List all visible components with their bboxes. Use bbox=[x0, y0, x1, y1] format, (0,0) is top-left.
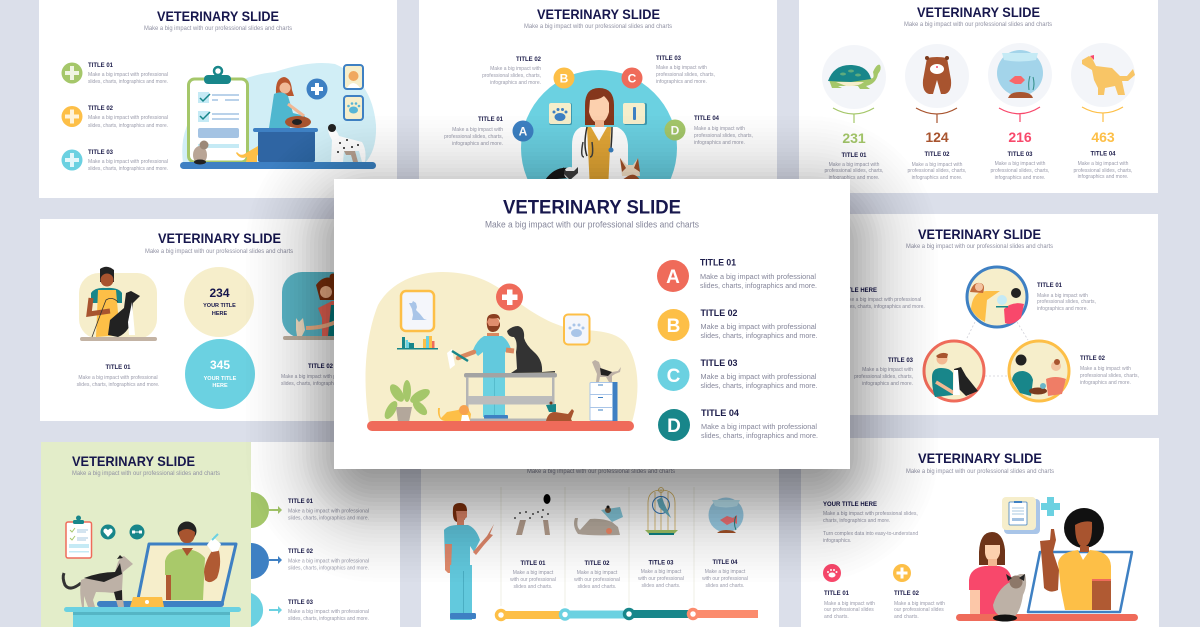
picture frame: dog bbox=[401, 291, 434, 331]
numbers and titles: TITLE 01 bbox=[841, 153, 867, 159]
item B: TITLE 02 bbox=[700, 308, 738, 319]
item list: Make a big impact with professional bbox=[288, 558, 369, 564]
numbers and titles: TITLE 04 bbox=[1090, 152, 1116, 158]
item B: Make a big impact with professional bbox=[700, 324, 817, 331]
callouts: Make a big impact with bbox=[862, 367, 913, 373]
orange cat bbox=[438, 405, 471, 421]
text block: charts, infographics and more. bbox=[823, 518, 890, 524]
subheading: Make a big impact with our professional slides and charts bbox=[524, 24, 672, 30]
subheading: Make a big impact with our professional slides and charts bbox=[72, 471, 220, 477]
floor bbox=[367, 421, 634, 431]
captions: slides, charts, infographics and more. bbox=[77, 382, 159, 388]
captions: Make a big impact bbox=[705, 569, 746, 575]
stat circle 234: HERE bbox=[212, 311, 227, 317]
numbers and titles: infographics and more. bbox=[912, 175, 962, 181]
captions: TITLE 02 bbox=[584, 561, 610, 567]
callouts: infographics and more. bbox=[452, 141, 503, 147]
captions: slides and charts. bbox=[514, 584, 552, 590]
subheading: Make a big impact with our professional slides and charts bbox=[145, 249, 293, 255]
item D: Make a big impact with professional bbox=[701, 424, 817, 431]
callouts: Make a big impact with bbox=[656, 65, 707, 71]
captions: with our professional bbox=[574, 577, 620, 583]
icon: medical cross bbox=[496, 284, 523, 310]
illustration: vet on laptop with cat bbox=[63, 522, 241, 627]
callouts: Make a big impact with bbox=[694, 126, 745, 132]
heading: VETERINARY SLIDE bbox=[158, 230, 281, 246]
numbers and titles: 463 bbox=[1091, 129, 1115, 145]
item list bbox=[288, 499, 369, 622]
stat circle 234 bbox=[184, 267, 254, 337]
badges A B C D: D bbox=[671, 124, 680, 138]
numbers and titles: Make a big impact with bbox=[829, 162, 880, 168]
icon items bbox=[823, 564, 945, 620]
item list: Make a big impact with professional bbox=[288, 609, 369, 615]
icon items: and charts. bbox=[824, 614, 849, 620]
circle: vets with plant bbox=[967, 267, 1027, 327]
callouts: infographics and more. bbox=[694, 140, 745, 146]
callouts: infographics and more. bbox=[1080, 380, 1131, 386]
panel: main centre slide bbox=[334, 179, 850, 469]
captions: with our professional bbox=[638, 576, 684, 582]
captions: slides, charts, infographics and more. bbox=[281, 381, 364, 387]
panel: slide bottom centre, timeline bbox=[421, 445, 779, 627]
item list: Make a big impact with professional bbox=[88, 72, 168, 78]
captions: TITLE 03 bbox=[648, 560, 674, 566]
captions: Make a big impact with professional bbox=[78, 375, 158, 381]
dashed connectors bbox=[966, 322, 1028, 376]
heading: VETERINARY SLIDE bbox=[72, 453, 195, 469]
icon: turtle bbox=[828, 65, 881, 89]
heading: VETERINARY SLIDE bbox=[157, 8, 279, 24]
panel: slide top left, checklist bbox=[39, 0, 397, 198]
item D: TITLE 04 bbox=[701, 408, 740, 419]
green side panel bbox=[41, 442, 251, 627]
panel: slide bottom left, laptop bbox=[41, 442, 400, 627]
callouts: slides, charts, infographics and more. bbox=[842, 304, 925, 310]
lettered list bbox=[657, 258, 818, 441]
item B: B bbox=[667, 316, 680, 337]
icon items: our professional slides bbox=[894, 607, 944, 613]
dividers bbox=[501, 487, 694, 606]
icon: cat bbox=[1082, 55, 1135, 95]
captions: with our professional bbox=[510, 577, 556, 583]
timeline bbox=[496, 610, 758, 620]
icon: bird cage bbox=[645, 488, 678, 535]
brown dog with cone bbox=[546, 402, 574, 421]
cabinet with cat bbox=[590, 360, 621, 421]
illustration: vet with kitten bbox=[282, 272, 353, 340]
text block: Make a big impact with professional slides, bbox=[823, 511, 918, 517]
heading: VETERINARY SLIDE bbox=[537, 6, 660, 22]
badges A B C D: A bbox=[519, 124, 528, 138]
stat circle 345: 345 bbox=[210, 358, 230, 372]
icon items: TITLE 01 bbox=[824, 591, 850, 597]
numbers and titles: 124 bbox=[925, 129, 949, 145]
icon items: Make a big impact with bbox=[894, 601, 945, 607]
captions: with our professional bbox=[702, 576, 748, 582]
illustration: pointing vet bbox=[444, 503, 494, 620]
panel: slide bottom right, telehealth bbox=[801, 438, 1159, 627]
main slide soft drop shadow, stacked translucent layers bbox=[246, 116, 938, 582]
panel: slide top right, animals bbox=[799, 0, 1158, 193]
numbers and titles: Make a big impact with bbox=[912, 162, 963, 168]
callouts: infographics and more. bbox=[490, 80, 541, 86]
stat circle 345: HERE bbox=[212, 383, 228, 389]
subheading: Make a big impact with our professional slides and charts bbox=[906, 469, 1054, 475]
callouts bbox=[444, 56, 753, 147]
veterinarian bbox=[447, 314, 514, 419]
callouts: professional slides, charts, bbox=[854, 374, 913, 380]
illustration: clipboard and icons bbox=[66, 516, 144, 558]
numbers and titles: 216 bbox=[1008, 129, 1032, 145]
numbers and titles: professional slides, charts, bbox=[991, 168, 1049, 174]
item list: TITLE 03 bbox=[288, 600, 314, 606]
numbers and titles: infographics and more. bbox=[1078, 174, 1128, 180]
item list: slides, charts, infographics and more. bbox=[288, 566, 369, 572]
item C: Make a big impact with professional bbox=[700, 374, 817, 381]
numbers and titles: professional slides, charts, bbox=[825, 168, 883, 174]
illustration: owner, cat and vet on laptop bbox=[956, 497, 1138, 622]
numbers and titles: Make a big impact with bbox=[1078, 161, 1129, 167]
illustration: doctor in circle bbox=[521, 70, 677, 226]
item B bbox=[658, 308, 818, 341]
animal circles bbox=[822, 43, 1135, 123]
callouts: TITLE 03 bbox=[888, 358, 914, 364]
circle: vet with dog bbox=[924, 341, 984, 401]
potted plant bbox=[382, 380, 432, 422]
stat circle 234: YOUR TITLE bbox=[203, 303, 236, 309]
main heading: VETERINARY SLIDE bbox=[503, 198, 681, 218]
item A: slides, charts, infographics and more. bbox=[700, 283, 817, 290]
callouts: infographics and more. bbox=[656, 79, 707, 85]
captions: slides and charts. bbox=[642, 583, 680, 589]
exam table bbox=[464, 373, 557, 421]
numbers and titles: TITLE 03 bbox=[1007, 152, 1033, 158]
item list: Make a big impact with professional bbox=[88, 115, 168, 121]
item B: slides, charts, infographics and more. bbox=[700, 333, 818, 340]
callouts: Make a big impact with professional bbox=[842, 297, 921, 303]
illustration: vet with dog on table bbox=[366, 272, 637, 431]
item list: TITLE 02 bbox=[288, 549, 314, 555]
icon: cat with cone bbox=[574, 506, 623, 535]
item A: Make a big impact with professional bbox=[700, 274, 816, 281]
badges A B C D bbox=[512, 68, 686, 142]
item A: TITLE 01 bbox=[700, 258, 737, 268]
captions: Make a big impact bbox=[577, 570, 618, 576]
captions: TITLE 01 bbox=[105, 365, 131, 371]
icon: hamster bbox=[923, 56, 951, 94]
text block: Turn complex data into easy-to-understand bbox=[823, 531, 918, 537]
captions: Make a big impact bbox=[513, 570, 554, 576]
captions: slides and charts. bbox=[706, 583, 744, 589]
subheading: Make a big impact with our professional slides and charts bbox=[527, 469, 675, 475]
captions: TITLE 02 bbox=[308, 364, 334, 370]
black dog bbox=[507, 326, 555, 373]
picture frame: paw bbox=[564, 314, 590, 344]
text block: infographics. bbox=[823, 538, 851, 544]
numbers and titles: professional slides, charts, bbox=[908, 168, 966, 174]
callouts: professional slides, charts, bbox=[694, 133, 753, 139]
callouts: TITLE HERE bbox=[842, 288, 877, 294]
item list: slides, charts, infographics and more. bbox=[88, 123, 168, 129]
item list: TITLE 02 bbox=[88, 106, 114, 112]
panel: slide top centre, doctor bbox=[419, 0, 777, 226]
callouts: Make a big impact with bbox=[1037, 293, 1088, 299]
numbers and titles: infographics and more. bbox=[995, 175, 1045, 181]
captions: TITLE 01 bbox=[520, 561, 546, 567]
icon items: Make a big impact with bbox=[824, 601, 875, 607]
subheading: Make a big impact with our professional slides and charts bbox=[904, 22, 1052, 28]
stat circle 345 bbox=[185, 339, 255, 409]
stat circle 234: 234 bbox=[209, 286, 230, 300]
item list: slides, charts, infographics and more. bbox=[288, 516, 369, 522]
shelf with books bbox=[397, 336, 438, 350]
illustration: vet at tub with clipboard and dog bbox=[180, 63, 376, 169]
item list: TITLE 01 bbox=[288, 499, 314, 505]
callouts: professional slides, charts, bbox=[1037, 299, 1096, 305]
callouts: TITLE 02 bbox=[1080, 356, 1106, 362]
captions: Make a big impact bbox=[641, 569, 682, 575]
numbers and titles: infographics and more. bbox=[829, 175, 879, 181]
panel: slide middle left, stats bbox=[40, 219, 364, 421]
illustration: groomer with dog bbox=[79, 267, 157, 341]
text block bbox=[823, 502, 918, 544]
callouts: Make a big impact with bbox=[452, 127, 503, 133]
callouts: professional slides, charts, bbox=[444, 134, 503, 140]
item D: slides, charts, infographics and more. bbox=[701, 433, 818, 440]
badges A B C D: B bbox=[560, 72, 569, 86]
item list: TITLE 03 bbox=[88, 150, 114, 156]
badges A B C D: C bbox=[628, 72, 637, 86]
item list: slides, charts, infographics and more. bbox=[88, 79, 168, 85]
main subheading: Make a big impact with our professional slides and charts bbox=[485, 220, 699, 230]
text block: YOUR TITLE HERE bbox=[823, 502, 877, 508]
item A: A bbox=[666, 267, 680, 288]
half-circle markers with arrows bbox=[251, 492, 282, 627]
callouts: professional slides, charts, bbox=[482, 73, 541, 79]
subheading: Make a big impact with our professional slides and charts bbox=[906, 244, 1053, 250]
captions: TITLE 04 bbox=[712, 560, 738, 566]
item C: TITLE 03 bbox=[700, 358, 738, 369]
subheading: Make a big impact with our professional slides and charts bbox=[144, 26, 292, 32]
captions bbox=[510, 560, 748, 590]
captions: Make a big impact with professional bbox=[281, 374, 360, 380]
callouts bbox=[842, 283, 1139, 387]
item C: slides, charts, infographics and more. bbox=[700, 383, 818, 390]
numbers and titles: professional slides, charts, bbox=[1074, 168, 1132, 174]
icon: dalmatian bbox=[509, 494, 557, 535]
callouts: infographics and more. bbox=[1037, 306, 1088, 312]
item C: C bbox=[667, 366, 681, 387]
item A bbox=[657, 258, 817, 292]
numbers and titles: 231 bbox=[842, 130, 866, 146]
callouts: professional slides, charts, bbox=[656, 72, 715, 78]
heading: VETERINARY SLIDE bbox=[918, 450, 1042, 466]
icon: fish bowl bbox=[708, 498, 744, 533]
callouts: Make a big impact with bbox=[490, 66, 541, 72]
callouts: infographics and more. bbox=[862, 381, 913, 387]
numbers and titles: Make a big impact with bbox=[995, 161, 1046, 167]
item D: D bbox=[667, 416, 681, 437]
callouts: TITLE 02 bbox=[516, 57, 542, 63]
item list: TITLE 01 bbox=[88, 63, 114, 69]
captions: slides and charts. bbox=[578, 584, 616, 590]
stat circle 345: YOUR TITLE bbox=[204, 376, 237, 382]
icon items: our professional slides bbox=[824, 607, 874, 613]
item D bbox=[658, 408, 818, 441]
item list: slides, charts, infographics and more. bbox=[288, 616, 369, 622]
callouts: TITLE 01 bbox=[478, 117, 504, 123]
callouts: professional slides, charts, bbox=[1080, 373, 1139, 379]
heading: VETERINARY SLIDE bbox=[918, 226, 1041, 242]
item C bbox=[658, 358, 818, 391]
item list bbox=[62, 62, 168, 172]
icon items: TITLE 02 bbox=[894, 591, 920, 597]
callouts: TITLE 01 bbox=[1037, 283, 1063, 289]
callouts: Make a big impact with bbox=[1080, 366, 1131, 372]
circle: vet with owner bbox=[1009, 341, 1069, 401]
captions bbox=[77, 364, 364, 388]
callouts: TITLE 03 bbox=[656, 56, 682, 62]
item list: slides, charts, infographics and more. bbox=[88, 166, 168, 172]
icon: fish bowl bbox=[997, 50, 1043, 98]
item list: Make a big impact with professional bbox=[288, 508, 369, 514]
item list: Make a big impact with professional bbox=[88, 159, 168, 165]
icon items: and charts. bbox=[894, 614, 919, 620]
callouts: TITLE 04 bbox=[694, 116, 720, 122]
heading: VETERINARY SLIDE bbox=[917, 4, 1040, 20]
numbers and titles bbox=[825, 129, 1132, 181]
panel: slide middle right, triangle bbox=[810, 214, 1158, 415]
numbers and titles: TITLE 02 bbox=[924, 152, 950, 158]
background blob bbox=[366, 272, 637, 422]
